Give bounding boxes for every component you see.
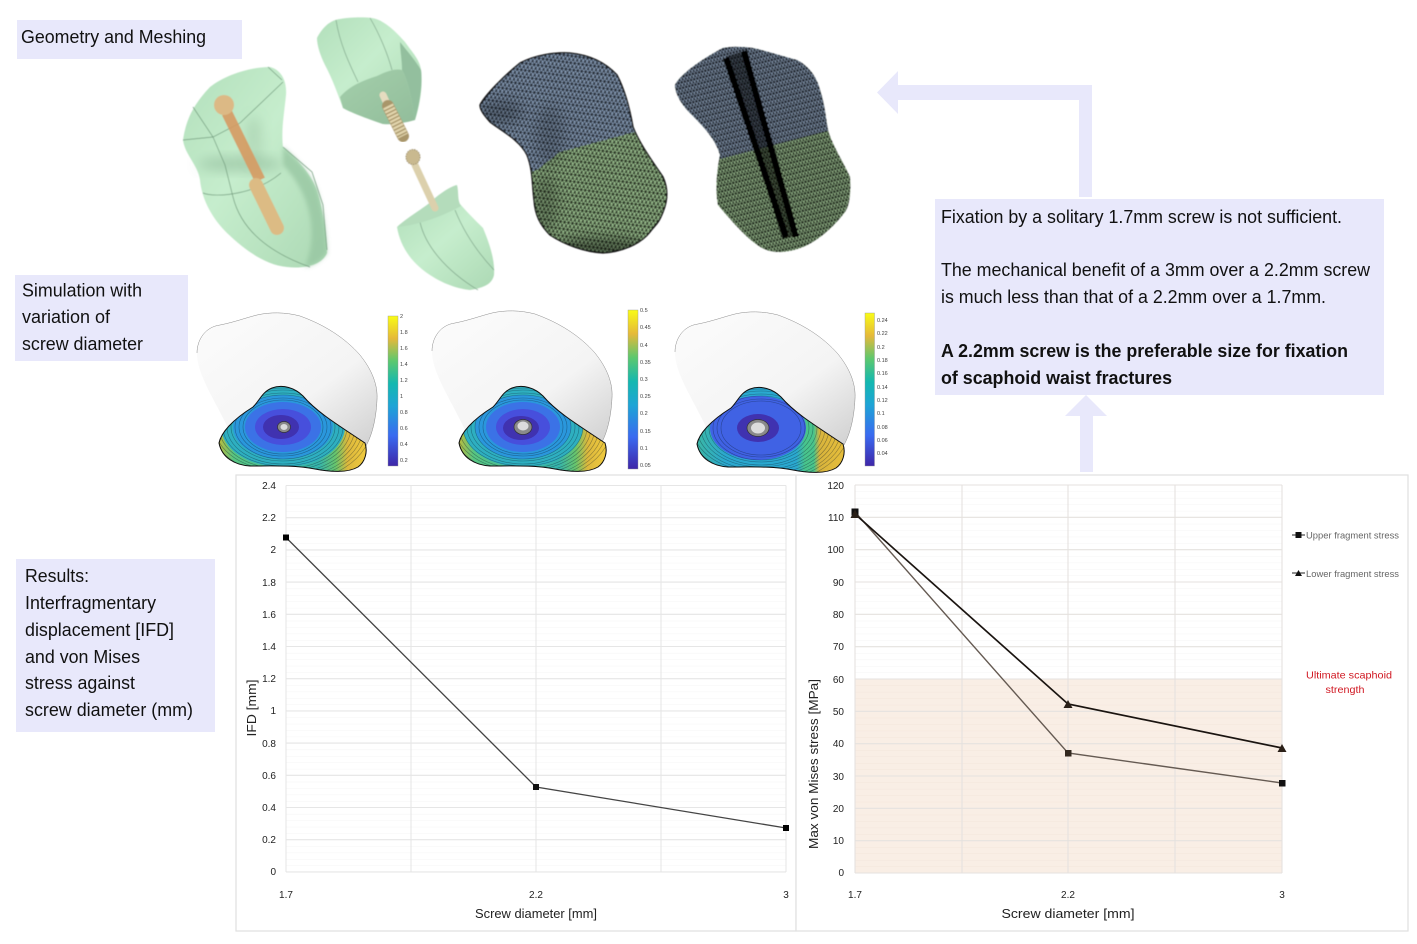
heading: Results: stress against bbox=[25, 673, 135, 693]
conclusions panel: A 2.2mm screw is the preferable size for fixation bbox=[941, 341, 1348, 361]
simulation result: 1.7 mm screw bbox=[195, 313, 377, 484]
colour bar 3: 0.14 bbox=[877, 385, 888, 391]
stress y axis labels: 110 bbox=[828, 513, 844, 524]
lower bone fragment with screw head bbox=[397, 150, 494, 290]
colour bar 1 bbox=[388, 314, 408, 466]
colour bar 1: 0.8 bbox=[400, 410, 408, 416]
stress y axis labels: 120 bbox=[827, 481, 844, 492]
colour bar 3: 0.1 bbox=[877, 411, 885, 417]
legend: Upper fragment stress bbox=[1306, 530, 1399, 542]
heading: Results: displacement [IFD] bbox=[25, 620, 174, 640]
heading: Geometry and Meshing bbox=[17, 20, 242, 59]
IFD y axis labels: 0.2 bbox=[262, 835, 276, 846]
ultimate strength band bbox=[855, 679, 1282, 873]
heading: Results: screw diameter (mm) bbox=[25, 700, 193, 720]
heading: Geometry and Meshing: Geometry and Meshing bbox=[21, 27, 206, 47]
IFD x axis labels: Screw diameter [mm] bbox=[475, 907, 597, 921]
stress y axis labels: 20 bbox=[833, 804, 844, 815]
colour bar 3: 0.22 bbox=[877, 331, 888, 337]
colour bar 2: 0.35 bbox=[640, 360, 651, 366]
external mesh model bbox=[478, 53, 667, 262]
colour bar 2: 0.5 bbox=[640, 308, 648, 314]
arrow: charts to conclusions bbox=[1065, 395, 1107, 472]
IFD y axis title: IFD [mm] bbox=[245, 680, 259, 736]
colour bar 2: 0.05 bbox=[640, 463, 651, 469]
heading: Results: Results: bbox=[25, 566, 89, 586]
cross-section mesh with screw channel bbox=[675, 47, 850, 252]
IFD x axis labels: 3 bbox=[783, 890, 789, 901]
colour bar 2: 0.1 bbox=[640, 446, 648, 452]
colour bar 2: 0.3 bbox=[640, 377, 648, 383]
bone model with embedded screw bbox=[183, 67, 327, 267]
stress y axis labels: 50 bbox=[833, 707, 844, 718]
colour bar 2: 0.45 bbox=[640, 325, 651, 331]
colour bar 2: 0.2 bbox=[640, 411, 648, 417]
IFD data line bbox=[283, 534, 789, 831]
stress y axis labels: 90 bbox=[833, 578, 844, 589]
chart: IFD against screw diameter bbox=[236, 475, 796, 931]
colour bar 1: 0.4 bbox=[400, 442, 408, 448]
legend: Lower fragment stress bbox=[1306, 569, 1399, 580]
stress x axis labels: 1.7 bbox=[848, 890, 862, 901]
colour bar 3: 0.08 bbox=[877, 425, 888, 431]
heading: Results: and von Mises bbox=[25, 647, 140, 667]
IFD y axis labels: 1.4 bbox=[262, 642, 276, 653]
colour bar 1: 2 bbox=[400, 314, 403, 320]
colour bar 1: 1.8 bbox=[400, 330, 408, 336]
colour bar 2: 0.25 bbox=[640, 394, 651, 400]
colour bar 3: 0.16 bbox=[877, 371, 888, 377]
IFD y axis labels: 1.8 bbox=[262, 578, 276, 589]
colour bar 3: 0.12 bbox=[877, 398, 888, 404]
IFD y axis labels: 1 bbox=[270, 706, 276, 717]
lower fragment stress line bbox=[850, 510, 1286, 752]
IFD y axis labels: 2.4 bbox=[262, 481, 276, 492]
colour bar 1: 0.6 bbox=[400, 426, 408, 432]
stress x axis labels bbox=[848, 890, 1285, 921]
colour bar 3: 0.04 bbox=[877, 451, 888, 457]
heading: Results bbox=[16, 559, 215, 732]
conclusions panel: is much less than that of a 2.2mm over a 1.7mm. bbox=[941, 287, 1326, 307]
colour bar 3 bbox=[865, 313, 888, 466]
callout: ultimate scaphoid strength bbox=[1306, 670, 1392, 696]
IFD y axis labels: 1.2 bbox=[262, 674, 276, 685]
simulation result: 2.2 mm screw bbox=[432, 311, 612, 484]
arrow: conclusions to geometry bbox=[877, 71, 1092, 197]
stress x axis labels: Screw diameter [mm] bbox=[1002, 907, 1134, 921]
callout: ultimate scaphoid strength: strength bbox=[1326, 684, 1365, 696]
stress y axis labels: 30 bbox=[833, 772, 844, 783]
colour bar 1: 1 bbox=[400, 394, 403, 400]
colour bar 1: 1.6 bbox=[400, 346, 408, 352]
stress y axis labels: 40 bbox=[833, 739, 844, 750]
simulation result: 3 mm screw bbox=[673, 312, 855, 485]
heading: Results: Interfragmentary bbox=[25, 593, 156, 613]
stress y axis labels: 60 bbox=[833, 675, 844, 686]
stress y axis labels: 80 bbox=[833, 610, 844, 621]
conclusions panel: Fixation by a solitary 1.7mm screw is not sufficient. bbox=[941, 207, 1342, 227]
stress y axis labels: 70 bbox=[833, 642, 844, 653]
callout: ultimate scaphoid strength: Ultimate scaphoid bbox=[1306, 670, 1392, 682]
conclusions panel: of scaphoid waist fractures bbox=[941, 368, 1172, 388]
colour bar 1: 0.2 bbox=[400, 458, 408, 464]
IFD y axis labels: 2 bbox=[270, 545, 276, 556]
legend bbox=[1292, 530, 1399, 580]
IFD y axis labels: 0.4 bbox=[262, 803, 276, 814]
heading: Simulation with variation of screw diameter: Simulation with bbox=[22, 280, 142, 300]
heading: Simulation with variation of screw diameter: variation of bbox=[22, 307, 111, 327]
heading: Simulation with variation of screw diameter: screw diameter bbox=[22, 334, 143, 354]
colour bar 2 bbox=[628, 308, 651, 469]
colour bar 1: 1.2 bbox=[400, 378, 408, 384]
IFD y axis labels bbox=[262, 481, 276, 878]
colour bar 3: 0.06 bbox=[877, 438, 888, 444]
IFD x axis labels bbox=[279, 890, 789, 921]
colour bar 3: 0.18 bbox=[877, 358, 888, 364]
colour bar 3: 0.24 bbox=[877, 318, 888, 324]
IFD y axis labels: 2.2 bbox=[262, 513, 276, 524]
colour bar 2: 0.15 bbox=[640, 429, 651, 435]
IFD x axis labels: 2.2 bbox=[529, 890, 543, 901]
IFD y axis labels: 0.8 bbox=[262, 739, 276, 750]
chart: von Mises stress against screw diameter bbox=[796, 475, 1408, 931]
stress y axis labels bbox=[827, 481, 844, 879]
stress x axis labels: 2.2 bbox=[1061, 890, 1075, 901]
upper fragment stress line bbox=[852, 508, 1286, 786]
stress x axis labels: 3 bbox=[1279, 890, 1285, 901]
conclusions panel bbox=[935, 199, 1384, 395]
IFD y axis labels: 0 bbox=[270, 867, 276, 878]
IFD y axis labels: 1.6 bbox=[262, 610, 276, 621]
colour bar 2: 0.4 bbox=[640, 343, 648, 349]
upper bone fragment with screw thread bbox=[317, 17, 422, 136]
stress y axis labels: 10 bbox=[833, 836, 844, 847]
conclusions panel: The mechanical benefit of a 3mm over a 2.2mm screw bbox=[941, 260, 1371, 280]
colour bar 3: 0.2 bbox=[877, 345, 885, 351]
stress y axis labels: 100 bbox=[827, 545, 844, 556]
stress y axis title: Max von Mises stress [MPa] bbox=[807, 679, 821, 849]
colour bar 1: 1.4 bbox=[400, 362, 408, 368]
heading: Simulation with variation of screw diameter bbox=[15, 275, 188, 361]
stress y axis labels: 0 bbox=[838, 868, 844, 879]
IFD y axis labels: 0.6 bbox=[262, 771, 276, 782]
IFD x axis labels: 1.7 bbox=[279, 890, 293, 901]
